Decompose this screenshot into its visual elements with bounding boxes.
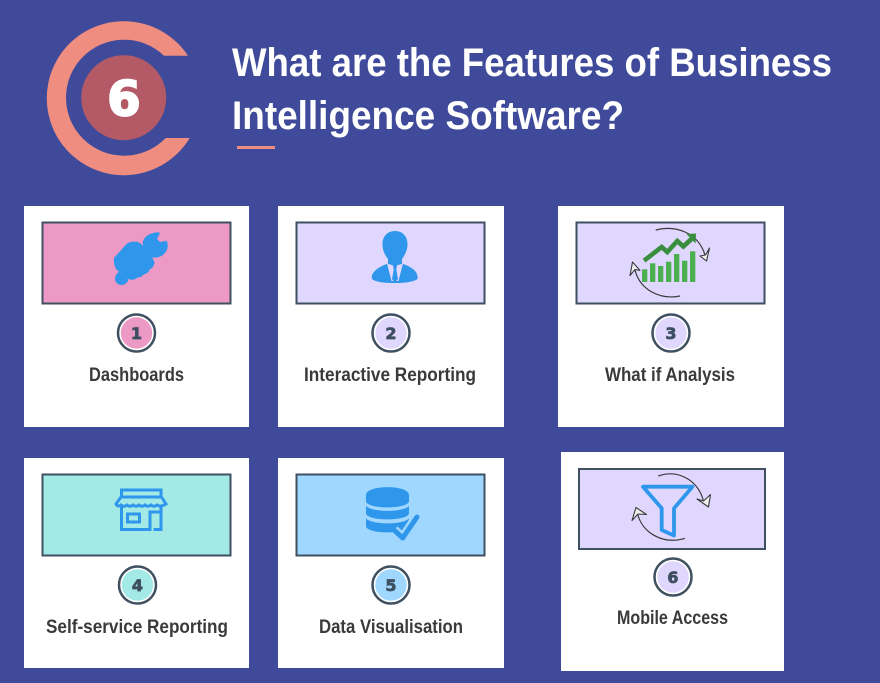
panel: dashboards: [24, 206, 249, 427]
icon: growth chart with cycle arrows: [630, 228, 710, 297]
icon: storefront: [116, 490, 166, 530]
label: Mobile Access: [617, 608, 728, 629]
number 5: 5: [385, 576, 397, 595]
label: Interactive Reporting: [304, 365, 476, 386]
panel: mobile access: [561, 452, 784, 671]
number 3: 3: [665, 324, 677, 343]
number 1: [118, 314, 155, 352]
label: What if Analysis: [605, 365, 735, 386]
icon: fist holding wrench: [114, 232, 168, 285]
number 4: [119, 566, 156, 604]
number 3: [652, 314, 690, 352]
number 1: 1: [131, 324, 142, 343]
badge: number 6 in ring: 6: [107, 72, 141, 128]
number 4: 4: [132, 576, 143, 595]
icon: businessperson: [372, 231, 418, 283]
number 2: [372, 314, 410, 352]
number 2: 2: [385, 324, 397, 343]
number 6: 6: [667, 568, 679, 587]
badge: number 6 in ring: [47, 21, 190, 175]
label: Self-service Reporting: [46, 617, 228, 638]
panel: what if analysis: [558, 206, 784, 427]
title: Intelligence Software?: [232, 94, 624, 138]
title underline: [237, 146, 275, 149]
title: What are the Features of Business: [232, 41, 832, 85]
panel: data visualisation: [278, 458, 504, 668]
number 5: [372, 566, 410, 604]
icon: database with check: [366, 487, 417, 538]
panel: interactive reporting: [278, 206, 504, 427]
label: Data Visualisation: [319, 617, 463, 638]
label: Dashboards: [89, 365, 184, 386]
panel: self-service reporting: [24, 458, 249, 668]
title: [232, 41, 832, 138]
icon: funnel with cycle arrows: [632, 474, 710, 540]
number 6: [654, 558, 692, 596]
